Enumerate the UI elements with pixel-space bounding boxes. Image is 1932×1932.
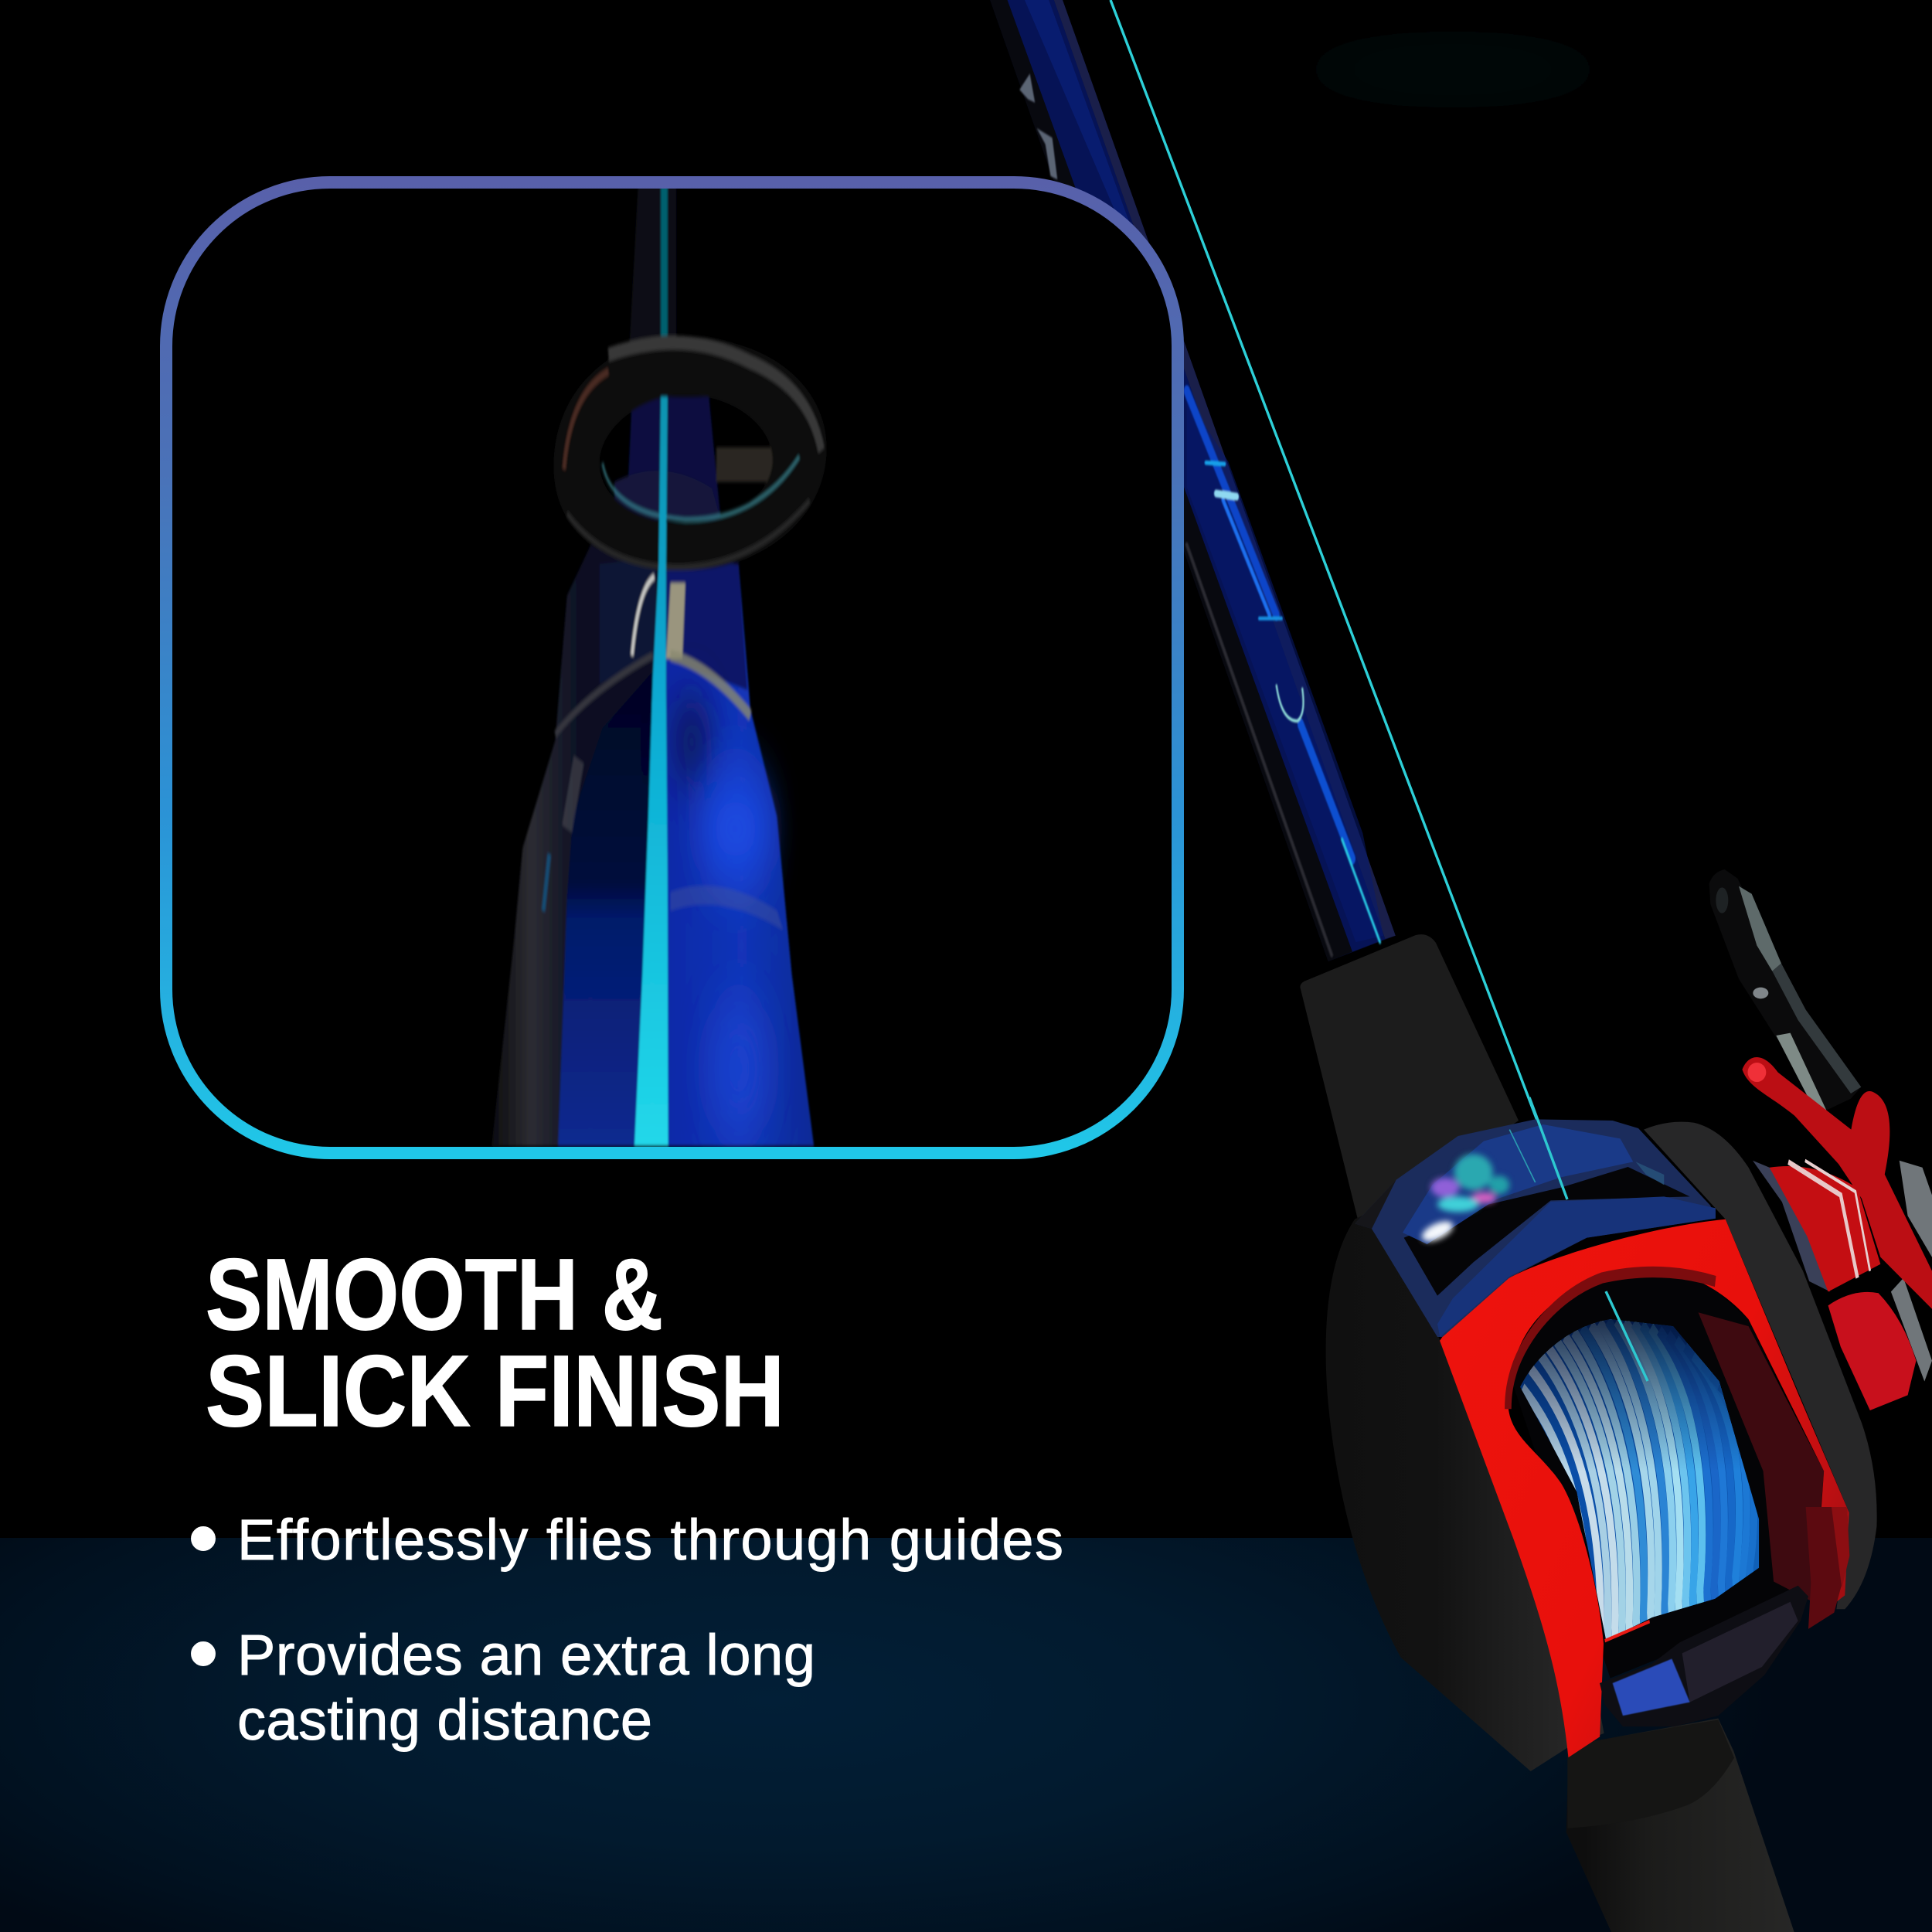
heading [206,1237,784,1447]
reel: iridescent reflection [1419,1154,1509,1246]
reel: drum, knob and star drag [1742,1057,1932,1410]
rod lettering [1019,73,1057,179]
inset: rod navy centre [558,672,653,1146]
reel: blue top frame [1355,1119,1716,1337]
reel: upper blue panel [1403,1124,1633,1244]
reel: red frame arch [1440,1219,1849,1757]
fishing rod blank [990,0,1396,961]
inset black fill [166,182,1178,1153]
reel: star arm [1742,1057,1932,1309]
baitcasting reel [1326,869,1932,1771]
bullet list [192,1508,1063,1752]
inset gradient border [166,182,1178,1153]
inset: line above guide [661,185,668,349]
background smoke [1283,31,1623,108]
reel: black slit window [1404,1167,1690,1296]
inset: rod grey left wall [492,545,668,1146]
bottom navy band [0,1538,1932,1932]
reel: blue lower bar [1437,1196,1716,1337]
fishing line upper [1111,0,1567,1199]
inset: braided line lower [634,396,668,1146]
reel: line into spool [1606,1291,1648,1381]
inset: guide ring shaft [716,447,773,482]
reel: black spool opening [1510,1264,1820,1678]
bullet: casting distance [192,1623,815,1752]
inset panel [166,182,1178,1153]
reel: main body left [1326,1209,1604,1771]
reel: red drum [1770,1166,1880,1291]
reel: knurled red knob [1828,1292,1916,1410]
reel: lower clear bracket [1600,1586,1808,1726]
bullet: guides: Effortlessly flies through guides [237,1508,1063,1572]
inset: blue mottling [671,696,771,1138]
heading: SMOOTH & [206,1237,663,1351]
bullet: casting distance: Provides an extra long [237,1623,815,1687]
reel: lever arm [1709,869,1861,1113]
inset: ring highlight [564,342,821,567]
lower foam grip [1566,1719,1794,1932]
bullet: casting distance: casting distance [237,1688,652,1752]
inset: thread wraps [543,577,750,911]
reel: grey handle right [1891,1161,1932,1382]
reel: dark red right limb and bracket [1600,1507,1849,1726]
inset: rod above guide [629,185,676,349]
upper foam grip [1300,934,1519,1229]
reel: braided line spool [1520,1319,1759,1638]
inset: guide ring [553,337,827,570]
inset: rod seen through guide [626,396,721,520]
reel: inner maroon wall [1699,1312,1824,1602]
inset close-up photo [492,185,827,1146]
reel: side body right [1644,1122,1877,1609]
heading: SLICK FINISH [206,1334,784,1447]
inset: rod blue right [666,564,814,1146]
rod streak highlights [1187,391,1380,955]
reel: fishing line over frame [1529,1097,1567,1199]
